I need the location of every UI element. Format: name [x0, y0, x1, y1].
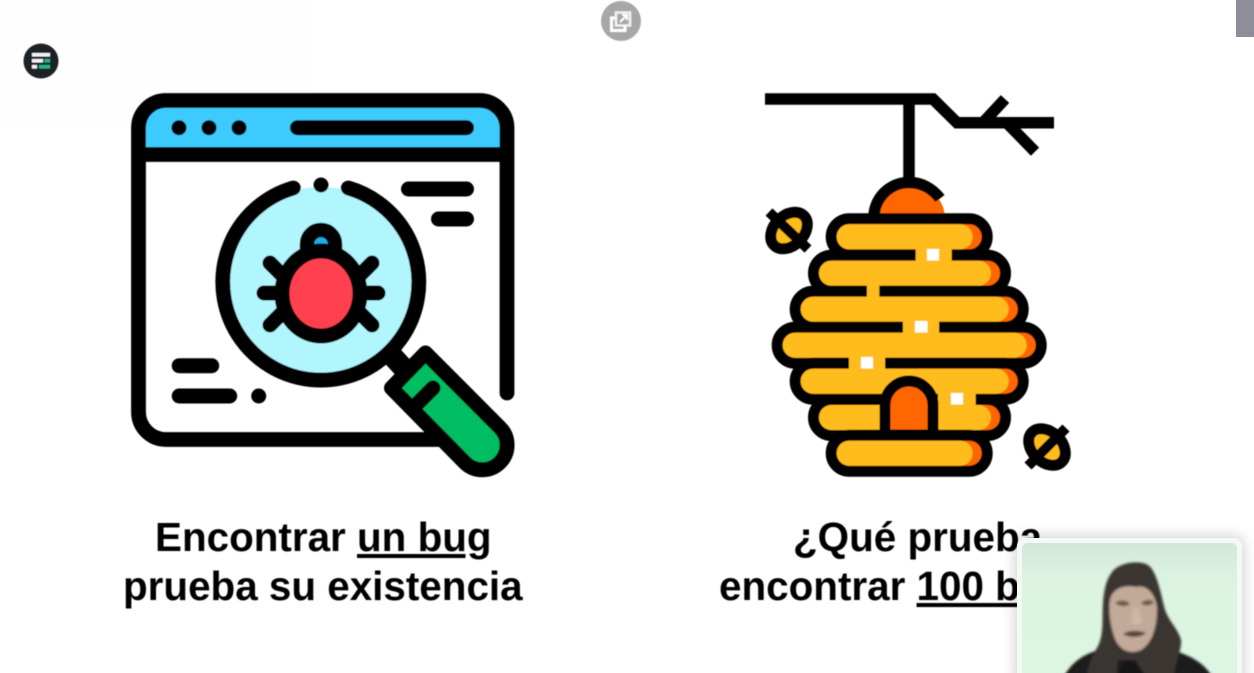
handle grip notch — [413, 388, 433, 408]
branch — [765, 99, 1054, 152]
presenter — [1062, 562, 1214, 673]
hive cap — [874, 183, 945, 218]
page text lines — [172, 182, 474, 404]
bug head — [307, 230, 335, 255]
caption left: prueba su existencia — [123, 563, 523, 609]
separator gaps — [849, 248, 976, 406]
bug legs — [264, 263, 378, 325]
white glints — [861, 249, 963, 404]
caption right — [719, 514, 1116, 609]
hive stem — [903, 99, 915, 180]
hive door — [885, 381, 933, 435]
bug body — [282, 251, 360, 336]
lens glint dot — [314, 178, 328, 192]
browser window frame — [138, 100, 507, 440]
magnifier handle — [392, 353, 507, 470]
tier 1 — [831, 219, 987, 255]
tier 4 — [777, 327, 1041, 363]
tier 5 — [795, 363, 1023, 399]
magnifier lens fill — [223, 187, 419, 383]
top right gray tab — [1236, 0, 1254, 37]
tier 7 — [831, 435, 987, 471]
tier 2 — [814, 255, 1006, 291]
caption left — [123, 514, 523, 609]
bug — [264, 230, 378, 336]
caption right: ¿Qué prueba — [793, 514, 1043, 560]
icon: beehive hanging from branch — [764, 99, 1072, 472]
caption right: encontrar 100 bugs? — [719, 563, 1116, 609]
webcam frame — [1017, 538, 1242, 673]
webcam panel — [1015, 536, 1244, 673]
webcam video — [1022, 543, 1237, 673]
caption left: Encontrar un bug — [155, 514, 492, 560]
icon: browser window with magnifying glass and bug — [138, 100, 507, 470]
hive cap outline — [874, 182, 940, 218]
logo badge — [24, 44, 58, 78]
magnifier lens ring — [223, 188, 419, 380]
hive tiers — [777, 219, 1041, 471]
webcam shadow — [1015, 536, 1244, 673]
tier 6 — [814, 400, 1006, 436]
bee left — [764, 205, 814, 256]
browser title bar — [138, 100, 507, 154]
tier 3 — [795, 291, 1023, 327]
title bar dots and address bar — [172, 120, 474, 135]
magnifier handle neck — [386, 349, 407, 372]
bee right — [1022, 422, 1072, 472]
top center pop-out button — [601, 1, 641, 41]
